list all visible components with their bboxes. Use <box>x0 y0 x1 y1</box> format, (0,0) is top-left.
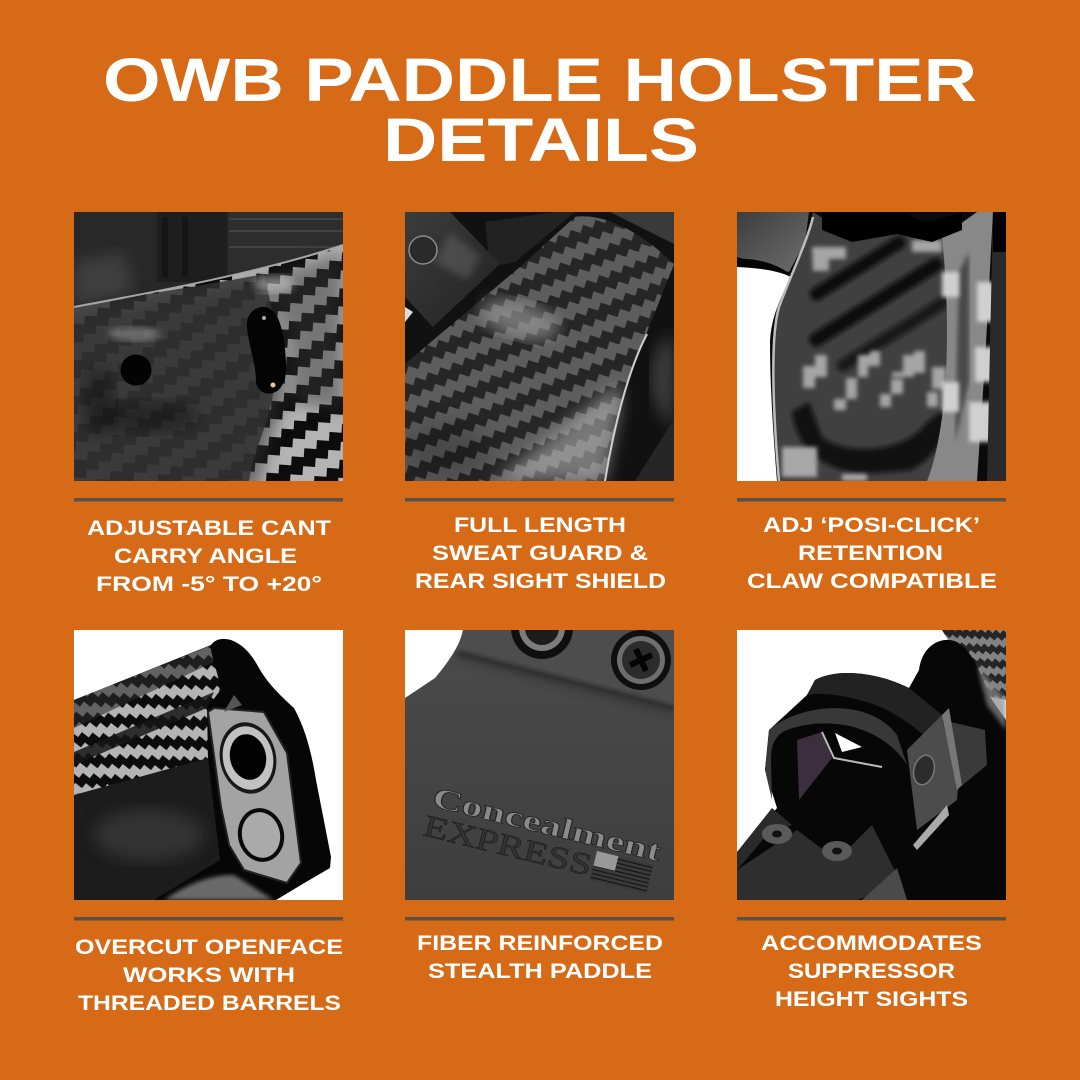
title: OWB PADDLE HOLSTER <box>103 46 977 114</box>
caption: retention: ADJ ‘POSI-CLICK’ <box>763 513 980 537</box>
title <box>103 46 977 174</box>
caption: sweat guard: REAR SIGHT SHIELD <box>415 569 666 593</box>
caption: adjustable cant: ADJUSTABLE CANT <box>87 516 331 540</box>
panel: overcut openface photo <box>74 630 343 900</box>
icon: screw right <box>611 630 671 690</box>
caption: stealth paddle: FIBER REINFORCED <box>417 931 663 955</box>
caption: overcut openface: WORKS WITH <box>123 963 295 987</box>
icon: flag <box>590 851 653 894</box>
logo: embossed brand <box>420 782 665 894</box>
caption: sweat guard: FULL LENGTH <box>454 513 626 537</box>
panel: suppressor sights photo <box>737 630 1006 900</box>
caption: suppressor sights: HEIGHT SIGHTS <box>775 987 968 1011</box>
icon: slide screw right <box>822 841 852 861</box>
panel: stealth paddle photo <box>405 630 674 900</box>
caption: adjustable cant <box>87 516 331 596</box>
caption: suppressor sights: SUPPRESSOR <box>788 959 956 983</box>
caption: overcut openface <box>75 935 343 1015</box>
caption: adjustable cant: CARRY ANGLE <box>114 544 297 568</box>
panel: sweat guard photo <box>405 212 674 481</box>
caption: overcut openface: OVERCUT OPENFACE <box>75 935 343 959</box>
caption: adjustable cant: FROM -5° TO +20° <box>96 572 322 596</box>
caption: sweat guard <box>415 513 666 593</box>
logo: embossed brand: Concealment <box>429 782 665 868</box>
divider row 2 <box>74 917 1006 920</box>
panel: retention claw photo <box>737 212 1006 481</box>
divider row 1 <box>74 498 1006 502</box>
panel: adjustable cant photo <box>74 212 343 481</box>
caption: retention <box>747 513 997 593</box>
caption: stealth paddle <box>417 931 663 983</box>
caption: retention: RETENTION <box>798 541 943 565</box>
caption: overcut openface: THREADED BARRELS <box>78 991 341 1015</box>
caption: sweat guard: SWEAT GUARD & <box>432 541 648 565</box>
logo: embossed brand: EXPRESS <box>420 808 596 883</box>
caption: suppressor sights <box>761 931 982 1011</box>
title: DETAILS <box>383 106 699 174</box>
caption: suppressor sights: ACCOMMODATES <box>761 931 982 955</box>
icon: screw left <box>511 597 573 659</box>
caption: stealth paddle: STEALTH PADDLE <box>428 959 652 983</box>
icon: slide screw left <box>762 824 792 844</box>
caption: retention: CLAW COMPATIBLE <box>747 569 997 593</box>
